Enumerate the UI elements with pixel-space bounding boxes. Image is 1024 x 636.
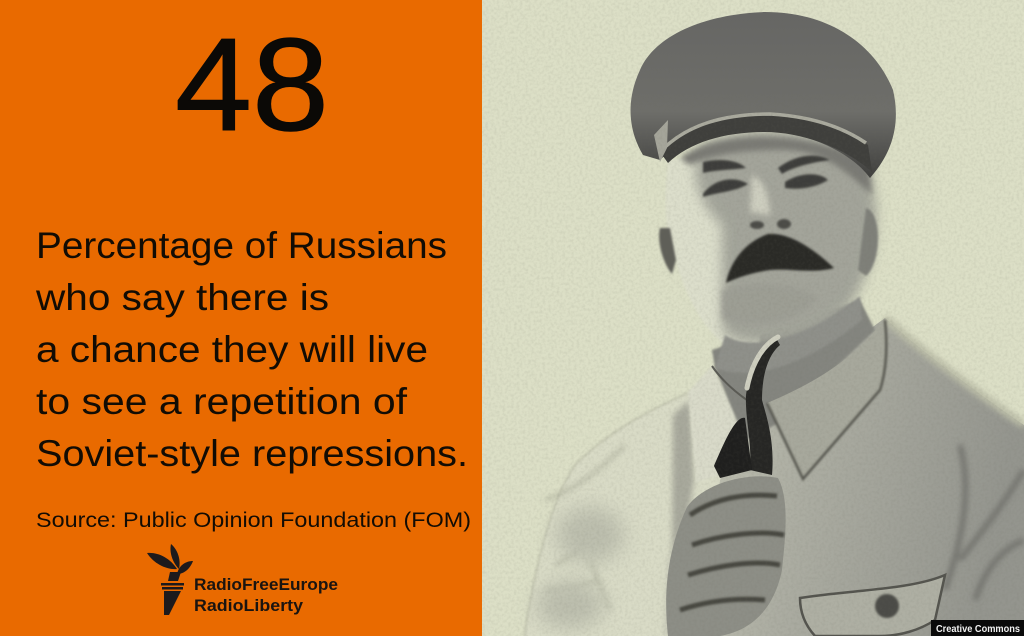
lower lip and chin shading bbox=[722, 284, 818, 325]
text block: source: Source: Public Opinion Foundation (FOM) bbox=[36, 508, 471, 532]
text block: description: who say there is bbox=[35, 276, 329, 318]
text: RadioFreeEurope RadioLiberty: RadioLiberty bbox=[194, 597, 304, 615]
text: RadioFreeEurope RadioLiberty bbox=[194, 576, 338, 615]
face: pale left side bbox=[666, 150, 760, 345]
text block: description: a chance they will live bbox=[36, 328, 428, 370]
right shoulder and jacket bbox=[700, 318, 1024, 636]
hand bbox=[666, 476, 786, 636]
text: RadioFreeEurope RadioLiberty: RadioFreeEurope bbox=[194, 576, 338, 594]
text block: description: Percentage of Russians bbox=[36, 224, 447, 266]
logo: RFE/RL bbox=[147, 544, 338, 615]
eyebrows and eyes bbox=[703, 156, 830, 197]
panel: photo background bbox=[482, 0, 1024, 636]
icon: torch with flame bbox=[147, 544, 193, 615]
moustache bbox=[726, 234, 834, 283]
face: gray right side bbox=[695, 129, 876, 344]
neck bbox=[715, 296, 862, 373]
cap brim bbox=[660, 115, 872, 172]
text block: description bbox=[35, 224, 468, 474]
jacket pocket bbox=[800, 575, 945, 636]
left arm and jacket (faded) bbox=[524, 390, 760, 636]
headline number: 48 bbox=[175, 11, 329, 158]
collar bbox=[712, 318, 886, 479]
text block: description: to see a repetition of bbox=[36, 380, 408, 422]
neck shadow bbox=[712, 300, 875, 440]
photo: man with cap and pipe bbox=[482, 0, 1024, 636]
ears bbox=[659, 228, 676, 274]
shirt front bbox=[688, 366, 745, 482]
forehead shadow bbox=[680, 137, 872, 195]
cap bbox=[631, 12, 896, 178]
nose highlight bbox=[750, 175, 770, 215]
nose bbox=[750, 219, 791, 229]
pipe bbox=[714, 337, 780, 478]
photo grain bbox=[482, 0, 1024, 636]
panel: orange text panel bbox=[0, 0, 482, 636]
face bbox=[666, 129, 876, 345]
text block: description: Soviet-style repressions. bbox=[36, 432, 468, 474]
